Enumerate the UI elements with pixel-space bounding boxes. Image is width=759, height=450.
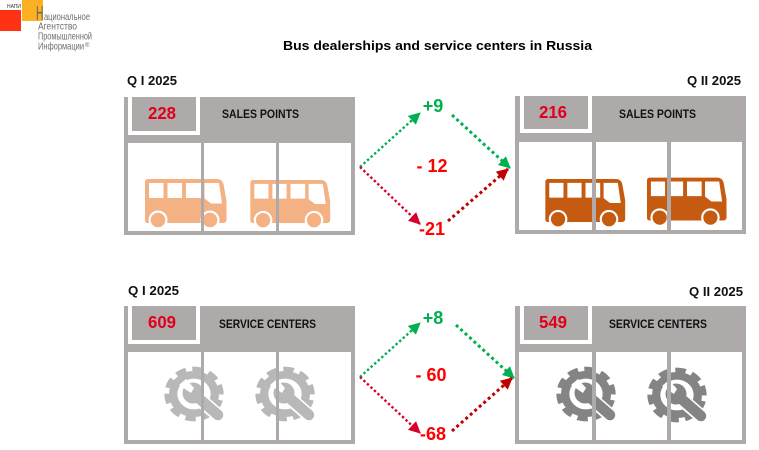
arrow: closed to Q II	[452, 378, 512, 431]
period label: Q I 2025	[127, 73, 177, 88]
panel frame	[515, 306, 746, 444]
heading: SALES POINTS	[619, 109, 696, 121]
arrow: opened	[360, 113, 420, 167]
value: 609	[148, 312, 176, 332]
period label: Q I 2025	[128, 283, 179, 298]
arrow: opened	[360, 323, 420, 377]
icon: gear and wrench	[253, 364, 317, 424]
change diagram: sales points	[360, 96, 510, 239]
logo: НАПИ	[7, 4, 21, 10]
icon: bus	[250, 180, 330, 229]
value: closed: -68	[420, 424, 446, 444]
heading: SERVICE CENTERS	[219, 319, 316, 331]
panel: sales points Q I 2025	[124, 73, 355, 235]
value: opened: +9	[423, 96, 443, 116]
arrow: closed to Q II	[448, 169, 508, 221]
icon: bus	[545, 179, 625, 228]
period label: Q II 2025	[689, 284, 743, 299]
panel: sales points Q II 2025	[515, 73, 746, 234]
logo: ациональное	[44, 11, 90, 23]
panel: service centers Q I 2025	[124, 283, 355, 444]
value: opened: +8	[423, 308, 443, 328]
change diagram: service centers	[360, 308, 514, 444]
icon: gear and wrench	[162, 364, 226, 424]
period label: Q II 2025	[687, 73, 741, 88]
arrow: opened to Q II	[456, 325, 514, 378]
arrow: closed	[360, 167, 420, 224]
icon: gear and wrench	[554, 364, 618, 424]
panel frame	[515, 96, 746, 234]
value: 228	[148, 103, 176, 123]
heading: SERVICE CENTERS	[609, 319, 707, 331]
logo: Н	[36, 3, 44, 25]
value: 216	[539, 102, 567, 122]
value: closed: -21	[419, 219, 445, 239]
panel: service centers Q II 2025	[515, 284, 746, 444]
panel frame	[124, 306, 355, 444]
arrow: closed	[360, 377, 420, 433]
value: 549	[539, 312, 567, 332]
value: net change: - 12	[416, 156, 448, 176]
icon: bus	[145, 179, 226, 230]
icon: bus	[647, 178, 727, 227]
logo: Агентство	[38, 20, 77, 32]
icon: gear and wrench	[645, 365, 709, 425]
logo	[0, 0, 92, 52]
logo: Промышленной	[38, 30, 92, 42]
title: Bus dealerships and service centers in Russia	[283, 39, 593, 53]
arrow: opened to Q II	[452, 115, 510, 168]
logo: ®	[85, 42, 90, 49]
panel frame	[124, 97, 355, 235]
heading: SALES POINTS	[222, 109, 299, 121]
logo: Информации	[38, 40, 84, 52]
value: net change: - 60	[415, 365, 447, 385]
